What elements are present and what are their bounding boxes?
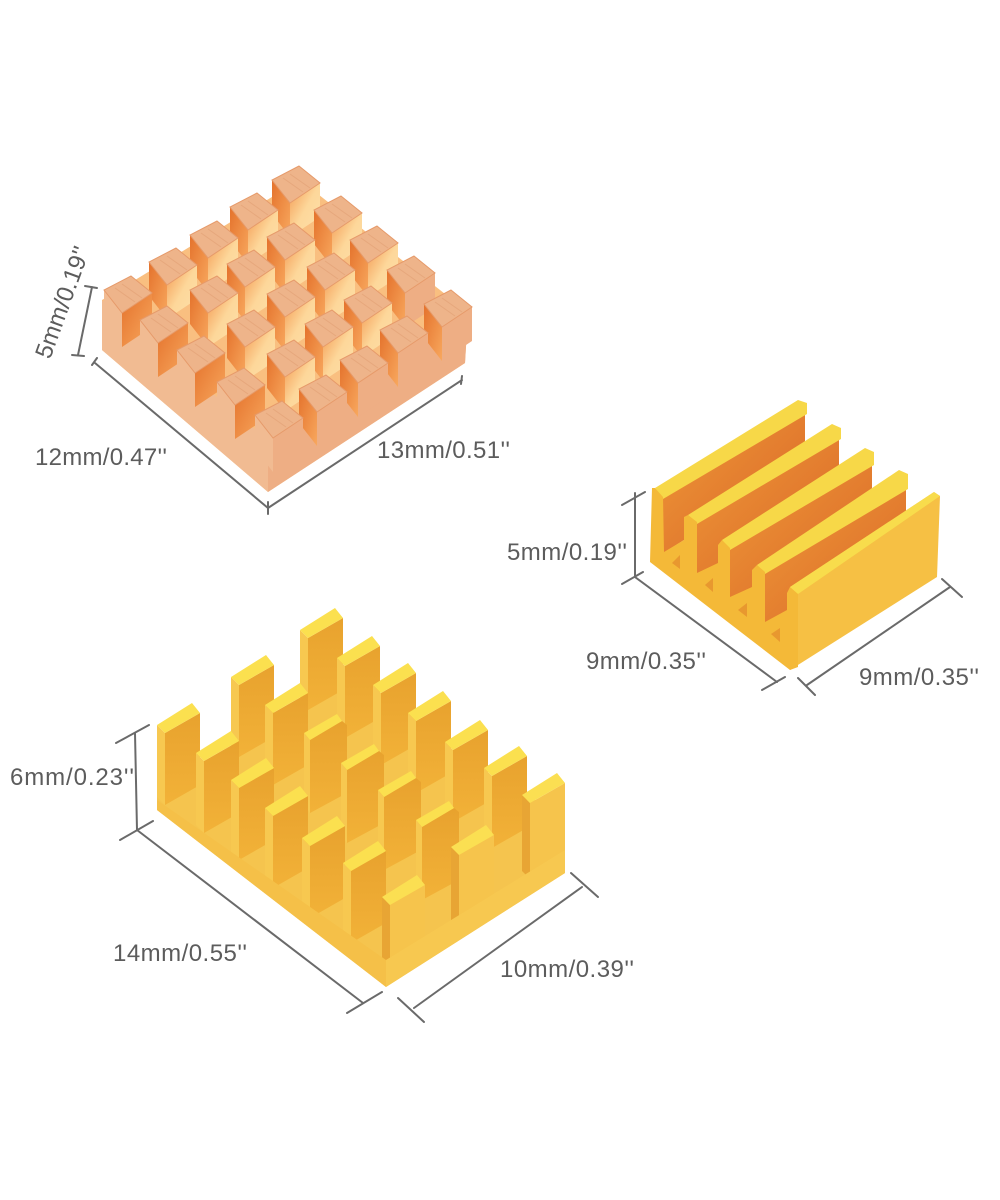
right face	[790, 492, 940, 670]
front fin tops	[790, 492, 940, 594]
small gold height dimension line	[622, 492, 645, 584]
copper pillars	[104, 166, 472, 472]
fins	[157, 608, 565, 981]
label: large gold height: 6mm/0.23''	[10, 764, 134, 791]
small gold width dimension line	[798, 579, 962, 695]
copper length dimension line	[92, 358, 268, 508]
base	[157, 680, 565, 987]
large gold heat sink	[157, 608, 565, 987]
label: copper length: 12mm/0.47''	[35, 444, 167, 471]
floor notches	[672, 555, 780, 642]
label: small gold length: 9mm/0.35''	[586, 648, 706, 675]
base front sides	[157, 800, 386, 987]
label: copper height: 5mm/0.19''	[30, 243, 96, 362]
large gold length dimension line	[137, 830, 382, 1013]
front comb face	[650, 488, 798, 670]
large gold width dimension line	[398, 873, 598, 1022]
copper height dimension line	[72, 286, 97, 356]
copper heat sink	[102, 166, 472, 492]
label: large gold width: 10mm/0.39''	[500, 956, 634, 983]
label: copper width: 13mm/0.51''	[377, 437, 510, 464]
copper base	[102, 180, 468, 492]
label: large gold length: 14mm/0.55''	[113, 940, 247, 967]
label: small gold height: 5mm/0.19''	[507, 539, 627, 566]
large gold height dimension line	[116, 725, 153, 840]
copper width dimension line	[268, 376, 462, 514]
small gold length dimension line	[635, 577, 785, 690]
label: small gold width: 9mm/0.35''	[859, 664, 979, 691]
small gold heat sink	[650, 400, 940, 670]
fin walls and tops	[655, 400, 908, 628]
